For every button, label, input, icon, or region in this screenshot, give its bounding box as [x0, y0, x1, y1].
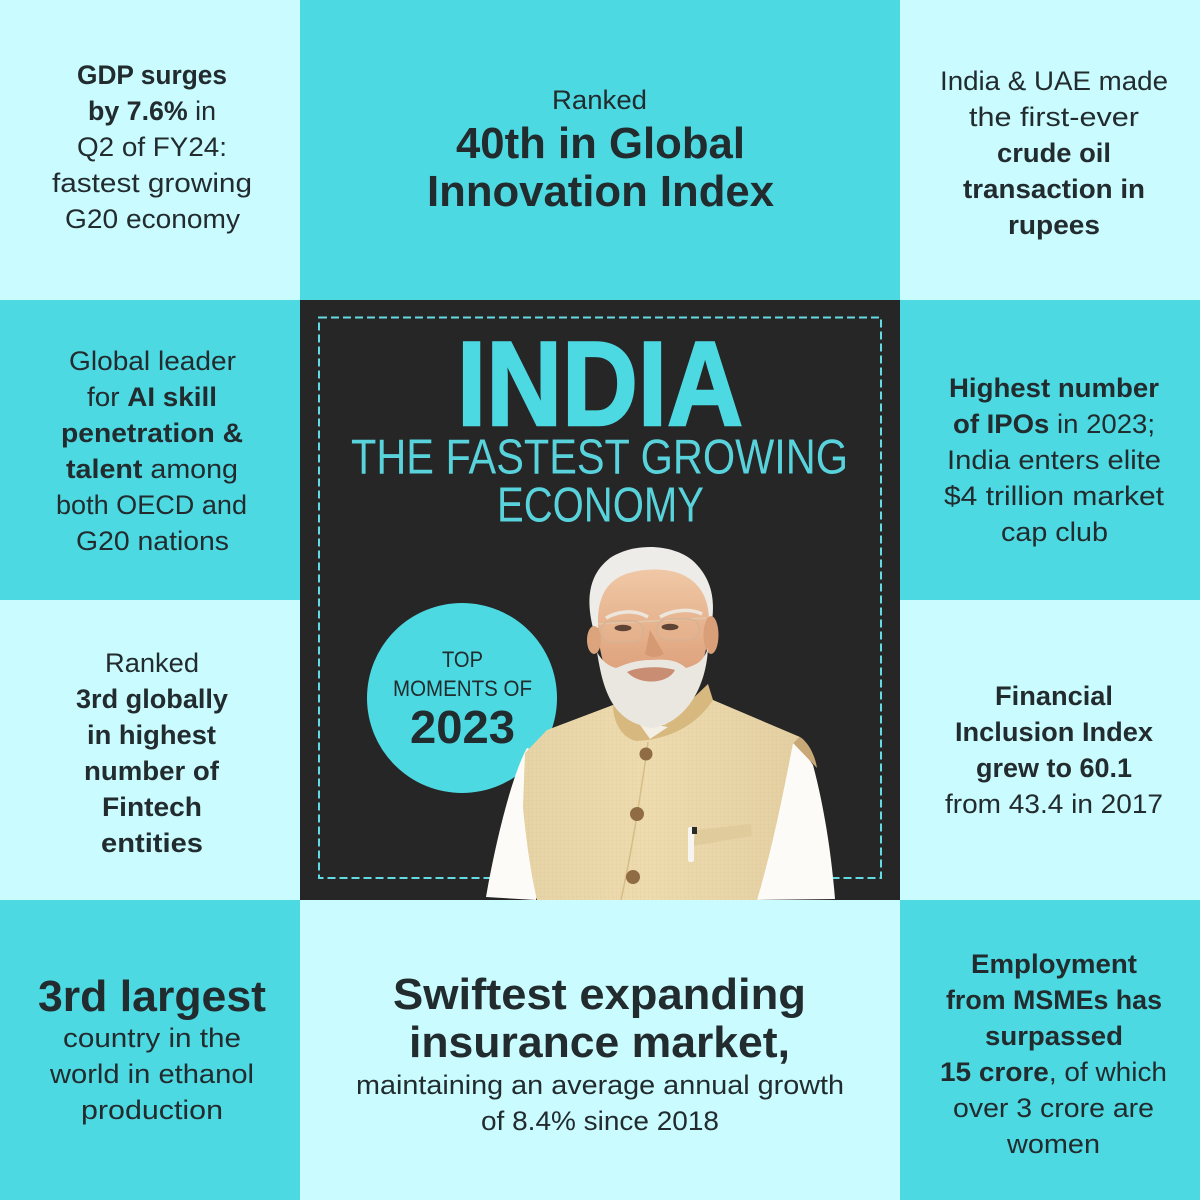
panel: Financial Inclusion Index	[900, 600, 1200, 900]
text: insurance growth	[356, 970, 844, 1136]
text: insurance growth: insurance market,	[409, 1018, 790, 1067]
panel: ethanol production	[0, 900, 300, 1200]
panel: MSME employment	[900, 900, 1200, 1200]
text: inclusion growth: grew to 60.1	[976, 753, 1132, 783]
panel: insurance market	[300, 900, 900, 1200]
text: inclusion growth: Financial	[995, 681, 1113, 711]
text: inclusion growth	[945, 681, 1163, 819]
text: GDP growth: GDP surges	[77, 60, 227, 90]
text: IPOs and market cap: $4 trillion market	[944, 481, 1165, 511]
badge: top moments of 2023: MOMENTS OF	[393, 676, 532, 701]
text: India and UAE transaction: India & UAE made	[940, 66, 1168, 96]
text: MSME jobs: 15 crore, of which	[940, 1057, 1167, 1087]
text: GDP growth: fastest growing	[52, 168, 252, 198]
text: innovation ranking	[427, 85, 775, 216]
text: MSME jobs: surpassed	[985, 1021, 1123, 1051]
text: ethanol ranking: production	[81, 1095, 223, 1125]
text: India and UAE transaction: rupees	[1008, 210, 1100, 240]
text: India and UAE transaction: the first-ever	[969, 102, 1139, 132]
panel: central title	[300, 300, 900, 900]
text: AI skill penetration: for AI skill	[87, 382, 217, 412]
text: MSME jobs	[940, 949, 1167, 1159]
text: AI skill penetration: penetration &	[61, 418, 243, 448]
subheading: the fastest growing economy: ECONOMY	[497, 478, 704, 532]
text: innovation ranking: Ranked	[552, 85, 647, 115]
text: GDP growth	[52, 60, 252, 234]
text: insurance growth: Swiftest expanding	[393, 970, 806, 1019]
text: India and UAE transaction	[940, 66, 1168, 240]
panel: GDP surges	[0, 0, 300, 300]
panel: Fintech	[0, 600, 300, 900]
text: AI skill penetration: both OECD and	[56, 490, 247, 520]
text: innovation ranking: 40th in Global	[456, 119, 745, 168]
text: inclusion growth: from 43.4 in 2017	[945, 789, 1163, 819]
text: GDP growth: by 7.6% in	[88, 96, 216, 126]
text: ethanol ranking: country in the	[63, 1023, 241, 1053]
text: AI skill penetration	[56, 346, 247, 556]
text: innovation ranking: Innovation Index	[427, 167, 775, 216]
text: AI skill penetration: Global leader	[69, 346, 236, 376]
text: Fintech ranking: entities	[101, 828, 203, 858]
text: MSME jobs: over 3 crore are	[953, 1093, 1154, 1123]
text: Fintech ranking: 3rd globally	[76, 684, 228, 714]
panel: AI skill leader	[0, 300, 300, 600]
text: IPOs and market cap: India enters elite	[947, 445, 1161, 475]
text: AI skill penetration: G20 nations	[76, 526, 229, 556]
badge: top moments of 2023: 2023	[410, 701, 515, 753]
text: Fintech ranking: Fintech	[102, 792, 202, 822]
text: insurance growth: of 8.4% since 2018	[481, 1106, 719, 1136]
text: ethanol ranking: 3rd largest	[38, 972, 266, 1021]
text: Fintech ranking: Ranked	[105, 648, 199, 678]
text: IPOs and market cap: Highest number	[949, 373, 1159, 403]
text: inclusion growth: Inclusion Index	[955, 717, 1153, 747]
text: Fintech ranking: in highest	[87, 720, 216, 750]
text: MSME jobs: from MSMEs has	[946, 985, 1162, 1015]
text: Fintech ranking: number of	[84, 756, 220, 786]
text: insurance growth: maintaining an average annual growth	[356, 1070, 844, 1100]
text: IPOs and market cap: cap club	[1001, 517, 1108, 547]
text: ethanol ranking	[38, 972, 266, 1125]
badge: top moments of 2023: TOP	[442, 647, 483, 672]
panel: crude oil in rupees	[900, 0, 1200, 300]
text: IPOs and market cap	[944, 373, 1165, 547]
text: ethanol ranking: world in ethanol	[49, 1059, 254, 1089]
text: India and UAE transaction: transaction in	[963, 174, 1145, 204]
text: IPOs and market cap: of IPOs in 2023;	[953, 409, 1155, 439]
subheading: the fastest growing economy: THE FASTEST GROWING	[351, 430, 848, 484]
text: GDP growth: Q2 of FY24:	[77, 132, 227, 162]
text: AI skill penetration: talent among	[66, 454, 238, 484]
portrait: man in waistcoat	[486, 547, 835, 900]
badge: top moments of 2023	[367, 603, 557, 793]
subheading: the fastest growing economy	[351, 430, 848, 532]
text: MSME jobs: Employment	[971, 949, 1137, 979]
heading: INDIA: INDIA	[457, 317, 743, 451]
text: GDP growth: G20 economy	[65, 204, 241, 234]
text: MSME jobs: women	[1006, 1129, 1100, 1159]
text: India and UAE transaction: crude oil	[997, 138, 1111, 168]
panel: Global Innovation Index	[300, 0, 900, 300]
panel: IPOs	[900, 300, 1200, 600]
text: Fintech ranking	[76, 648, 228, 858]
